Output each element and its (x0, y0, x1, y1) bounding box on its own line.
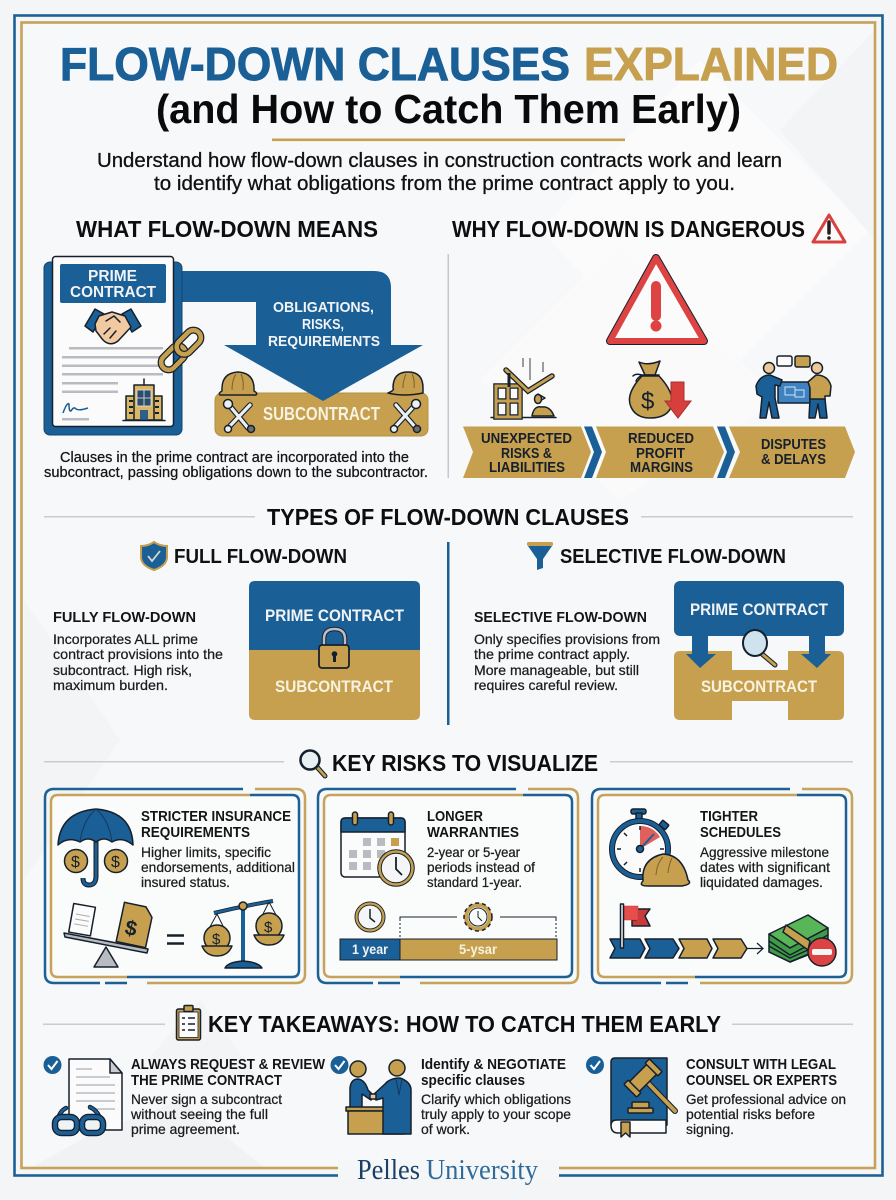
icon: shield (141, 542, 167, 570)
icon: hard hat left (219, 372, 257, 395)
text: THE PRIME CONTRACT (131, 1072, 282, 1089)
description: schedules: Aggressive milestone (700, 844, 829, 860)
chevron: reduced profit: PROFIT (636, 446, 685, 462)
arrow: obligations flow from prime contract to subcontract: OBLIGATIONS, (273, 299, 374, 316)
description: fully flow-down: Incorporates ALL prime (53, 631, 198, 647)
diagram: prime contract locked to subcontract: SUBCONTRACT (275, 677, 394, 696)
footer brand: Pelles University (357, 1155, 538, 1186)
description: warranties: standard 1-year. (427, 874, 522, 890)
description: insurance (141, 808, 295, 890)
heading: full flow-down: FULL FLOW-DOWN (174, 546, 347, 568)
takeaway: identify and negotiate (330, 1056, 571, 1137)
description: insurance: STRICTER INSURANCE (141, 808, 291, 825)
card: stricter insurance requirements (45, 789, 305, 983)
chevron: reduced profit: REDUCED (628, 431, 694, 447)
icon: two people shaking hands over desk (346, 1060, 411, 1134)
warranty length bracket (400, 903, 556, 937)
footer brand: Pelles University: Pelles (357, 1155, 420, 1186)
icon: check badge (44, 1056, 62, 1074)
description: selective flow-down: requires careful review. (474, 677, 618, 693)
description: warranties: LONGER (427, 808, 483, 825)
icon: calendar with clock (341, 812, 412, 884)
icon: balance scales (202, 901, 284, 968)
chevron: reduced profit: MARGINS (630, 460, 693, 476)
subcontract box (215, 372, 428, 436)
timeline bar: 1 year vs 5 year: 5-ysar (459, 941, 497, 957)
description: selective flow-down: SELECTIVE FLOW-DOWN (474, 609, 647, 626)
prime contract document (44, 256, 182, 435)
takeaway: consult legal counsel (586, 1056, 846, 1137)
icon: hard hat right (388, 372, 423, 395)
description: selective flow-down: More manageable, but still (474, 662, 639, 678)
icon: small clock (356, 904, 384, 930)
description: insurance: insured status. (141, 874, 230, 890)
chevron: unexpected risks: RISKS & (501, 446, 552, 462)
description: warranties: periods instead of (427, 859, 535, 875)
diagram: selected provisions flow to subcontract: PRIME CONTRACT (690, 600, 829, 619)
icon: crossed tools right (390, 400, 420, 432)
text (130, 1056, 326, 1137)
heading: key takeaways: KEY TAKEAWAYS: HOW TO CATCH THEM EARLY (208, 1011, 721, 1037)
text: without seeing the full (130, 1106, 268, 1122)
text: potential risks before (686, 1106, 815, 1122)
description: insurance: endorsements, additional (141, 859, 295, 875)
text: Never sign a subcontract (131, 1091, 282, 1107)
description: schedules: dates with significant (700, 859, 830, 875)
text: ALWAYS REQUEST & REVIEW (131, 1056, 326, 1073)
flow of three consequence chevrons (463, 426, 855, 478)
icon: clipboard (176, 1006, 200, 1040)
icon: balance scales: $ (264, 919, 273, 936)
icon: handshake (85, 309, 141, 344)
description: fully flow-down: maximum burden. (53, 677, 168, 693)
icon: umbrella with coins (58, 809, 133, 885)
icon: law book with gavel (611, 1058, 675, 1137)
text: signing. (686, 1121, 734, 1137)
panel: full flow-down (53, 542, 420, 720)
arrow: obligations flow from prime contract to subcontract: RISKS, (302, 316, 344, 333)
section: key risks to visualize (44, 750, 853, 983)
icon: umbrella with coins: $ (71, 854, 80, 871)
text: of work. (421, 1121, 470, 1137)
chevron: unexpected risks: UNEXPECTED (481, 431, 572, 447)
text (421, 1056, 571, 1137)
icon: large warning triangle (610, 258, 704, 341)
text: truly apply to your scope (421, 1106, 571, 1122)
description: fully flow-down: FULLY FLOW-DOWN (53, 609, 196, 626)
icon: chain link (158, 327, 204, 373)
description: fully flow-down: subcontract. High risk, (53, 662, 192, 678)
chevron: unexpected risks (463, 426, 591, 478)
text (686, 1056, 846, 1137)
card border (318, 789, 578, 983)
icon: unbalanced seesaw with documents: $ (123, 916, 139, 941)
title (60, 38, 838, 141)
arrow: obligations flow from prime contract to subcontract (180, 271, 423, 401)
chevron: disputes (729, 426, 855, 478)
diagram: prime contract locked to subcontract: PRIME CONTRACT (265, 606, 405, 625)
icon: check badge (330, 1056, 348, 1074)
signature (63, 404, 88, 413)
icon: balance scales: $ (212, 931, 221, 948)
section: types of flow-down clauses (44, 504, 853, 725)
text: specific clauses (421, 1072, 525, 1089)
icon: money bag with down arrow: $ (641, 388, 654, 415)
caption (44, 449, 428, 481)
heading: types: TYPES OF FLOW-DOWN CLAUSES (267, 504, 629, 530)
timeline bar: 1 year vs 5 year (340, 939, 557, 960)
subtitle: Understand how flow-down clauses in construction contracts work and learn (97, 150, 782, 172)
section: key takeaways (43, 1006, 853, 1137)
caption: Clauses in the prime contract are incorporated into the (60, 449, 409, 466)
description: insurance: Higher limits, specific (141, 844, 271, 860)
title: FLOW-DOWN CLAUSES (60, 38, 570, 90)
icon: document (69, 1059, 122, 1130)
icon: glasses (55, 1107, 103, 1133)
diagram: selected provisions flow to subcontract: SUBCONTRACT (701, 677, 818, 696)
heading: what flow-down means: WHAT FLOW-DOWN MEANS (76, 216, 378, 242)
icon: umbrella with coins: $ (111, 854, 120, 871)
description: selective flow-down: the prime contract apply. (474, 646, 630, 662)
description: schedules: liquidated damages. (700, 874, 823, 890)
subtitle: to identify what obligations from the prime contract apply to you. (154, 173, 735, 195)
chevron: reduced profit (596, 426, 724, 478)
description: fully flow-down (53, 609, 223, 693)
icon: flag (620, 904, 650, 948)
description: schedules: TIGHTER (700, 808, 758, 825)
arrow: obligations flow from prime contract to subcontract: REQUIREMENTS (268, 333, 380, 350)
prime contract document: CONTRACT (70, 284, 156, 301)
chevron: unexpected risks: LIABILITIES (489, 460, 565, 476)
prime contract document: PRIME (88, 268, 137, 285)
icon: gear clock (464, 903, 492, 931)
icon: building (123, 379, 165, 420)
description: fully flow-down: contract provisions into the (53, 646, 223, 662)
card border (592, 789, 852, 983)
card border (45, 789, 305, 983)
description: selective flow-down: Only specifies provisions from (474, 631, 660, 647)
card: tighter schedules (592, 789, 852, 983)
heading: key risks: KEY RISKS TO VISUALIZE (332, 750, 598, 776)
icon: cash stack with minus (769, 915, 836, 966)
description: warranties: 2-year or 5-year (427, 844, 520, 860)
panel: what flow-down means (44, 216, 428, 481)
milestone timeline (610, 904, 763, 958)
text: COUNSEL OR EXPERTS (686, 1072, 837, 1089)
title: (and How to Catch Them Early) (156, 86, 741, 132)
diagram: selected provisions flow to subcontract (674, 581, 844, 720)
chevron: disputes: DISPUTES (761, 437, 826, 453)
icon: magnifier (300, 750, 325, 776)
timeline bar: 1 year vs 5 year: 1 year (352, 941, 388, 957)
icon: funnel (527, 542, 553, 570)
title: EXPLAINED (584, 38, 838, 90)
equals sign (167, 936, 184, 944)
text: Get professional advice on (686, 1091, 846, 1107)
panel: why flow-down is dangerous (452, 215, 855, 478)
diagram: prime contract locked to subcontract (249, 581, 420, 720)
caption: subcontract, passing obligations down to the subcontractor. (44, 464, 428, 481)
description: selective flow-down (474, 609, 660, 693)
card: longer warranties (318, 789, 578, 983)
description: insurance: REQUIREMENTS (141, 824, 250, 841)
footer brand: Pelles University: University (426, 1155, 538, 1186)
subcontract box: SUBCONTRACT (263, 404, 380, 424)
icon: crossed tools left (224, 400, 254, 432)
description: warranties: WARRANTIES (427, 824, 519, 841)
arrow: left selected provision (686, 634, 716, 668)
icon: padlock (319, 629, 349, 668)
heading: why flow-down is dangerous: WHY FLOW-DOWN IS DANGEROUS (452, 216, 805, 242)
icon: people with blueprint (756, 356, 831, 418)
text: Identify & NEGOTIATE (421, 1056, 566, 1073)
heading: selective flow-down: SELECTIVE FLOW-DOWN (560, 546, 786, 568)
icon: magnifier (743, 630, 775, 665)
icon: check badge (586, 1056, 604, 1074)
icon: money bag with down arrow (629, 361, 691, 418)
panel: selective flow-down (474, 542, 844, 720)
subtitle (97, 150, 782, 195)
text: CONSULT WITH LEGAL (686, 1056, 836, 1073)
description: schedules: SCHEDULES (700, 824, 781, 841)
description: warranties (427, 808, 535, 890)
text: prime agreement. (131, 1121, 240, 1137)
icon: stopwatch with hard hat (612, 809, 690, 886)
description: schedules (700, 808, 830, 890)
icon: small warning triangle (813, 215, 845, 242)
text: Clarify which obligations (421, 1091, 571, 1107)
takeaway: request and review prime contract (44, 1056, 326, 1137)
icon: unbalanced seesaw with documents (64, 902, 154, 967)
icon: collapsing structure (491, 358, 556, 418)
arrow: right selected provision (801, 634, 831, 668)
chevron: disputes: & DELAYS (761, 452, 826, 468)
